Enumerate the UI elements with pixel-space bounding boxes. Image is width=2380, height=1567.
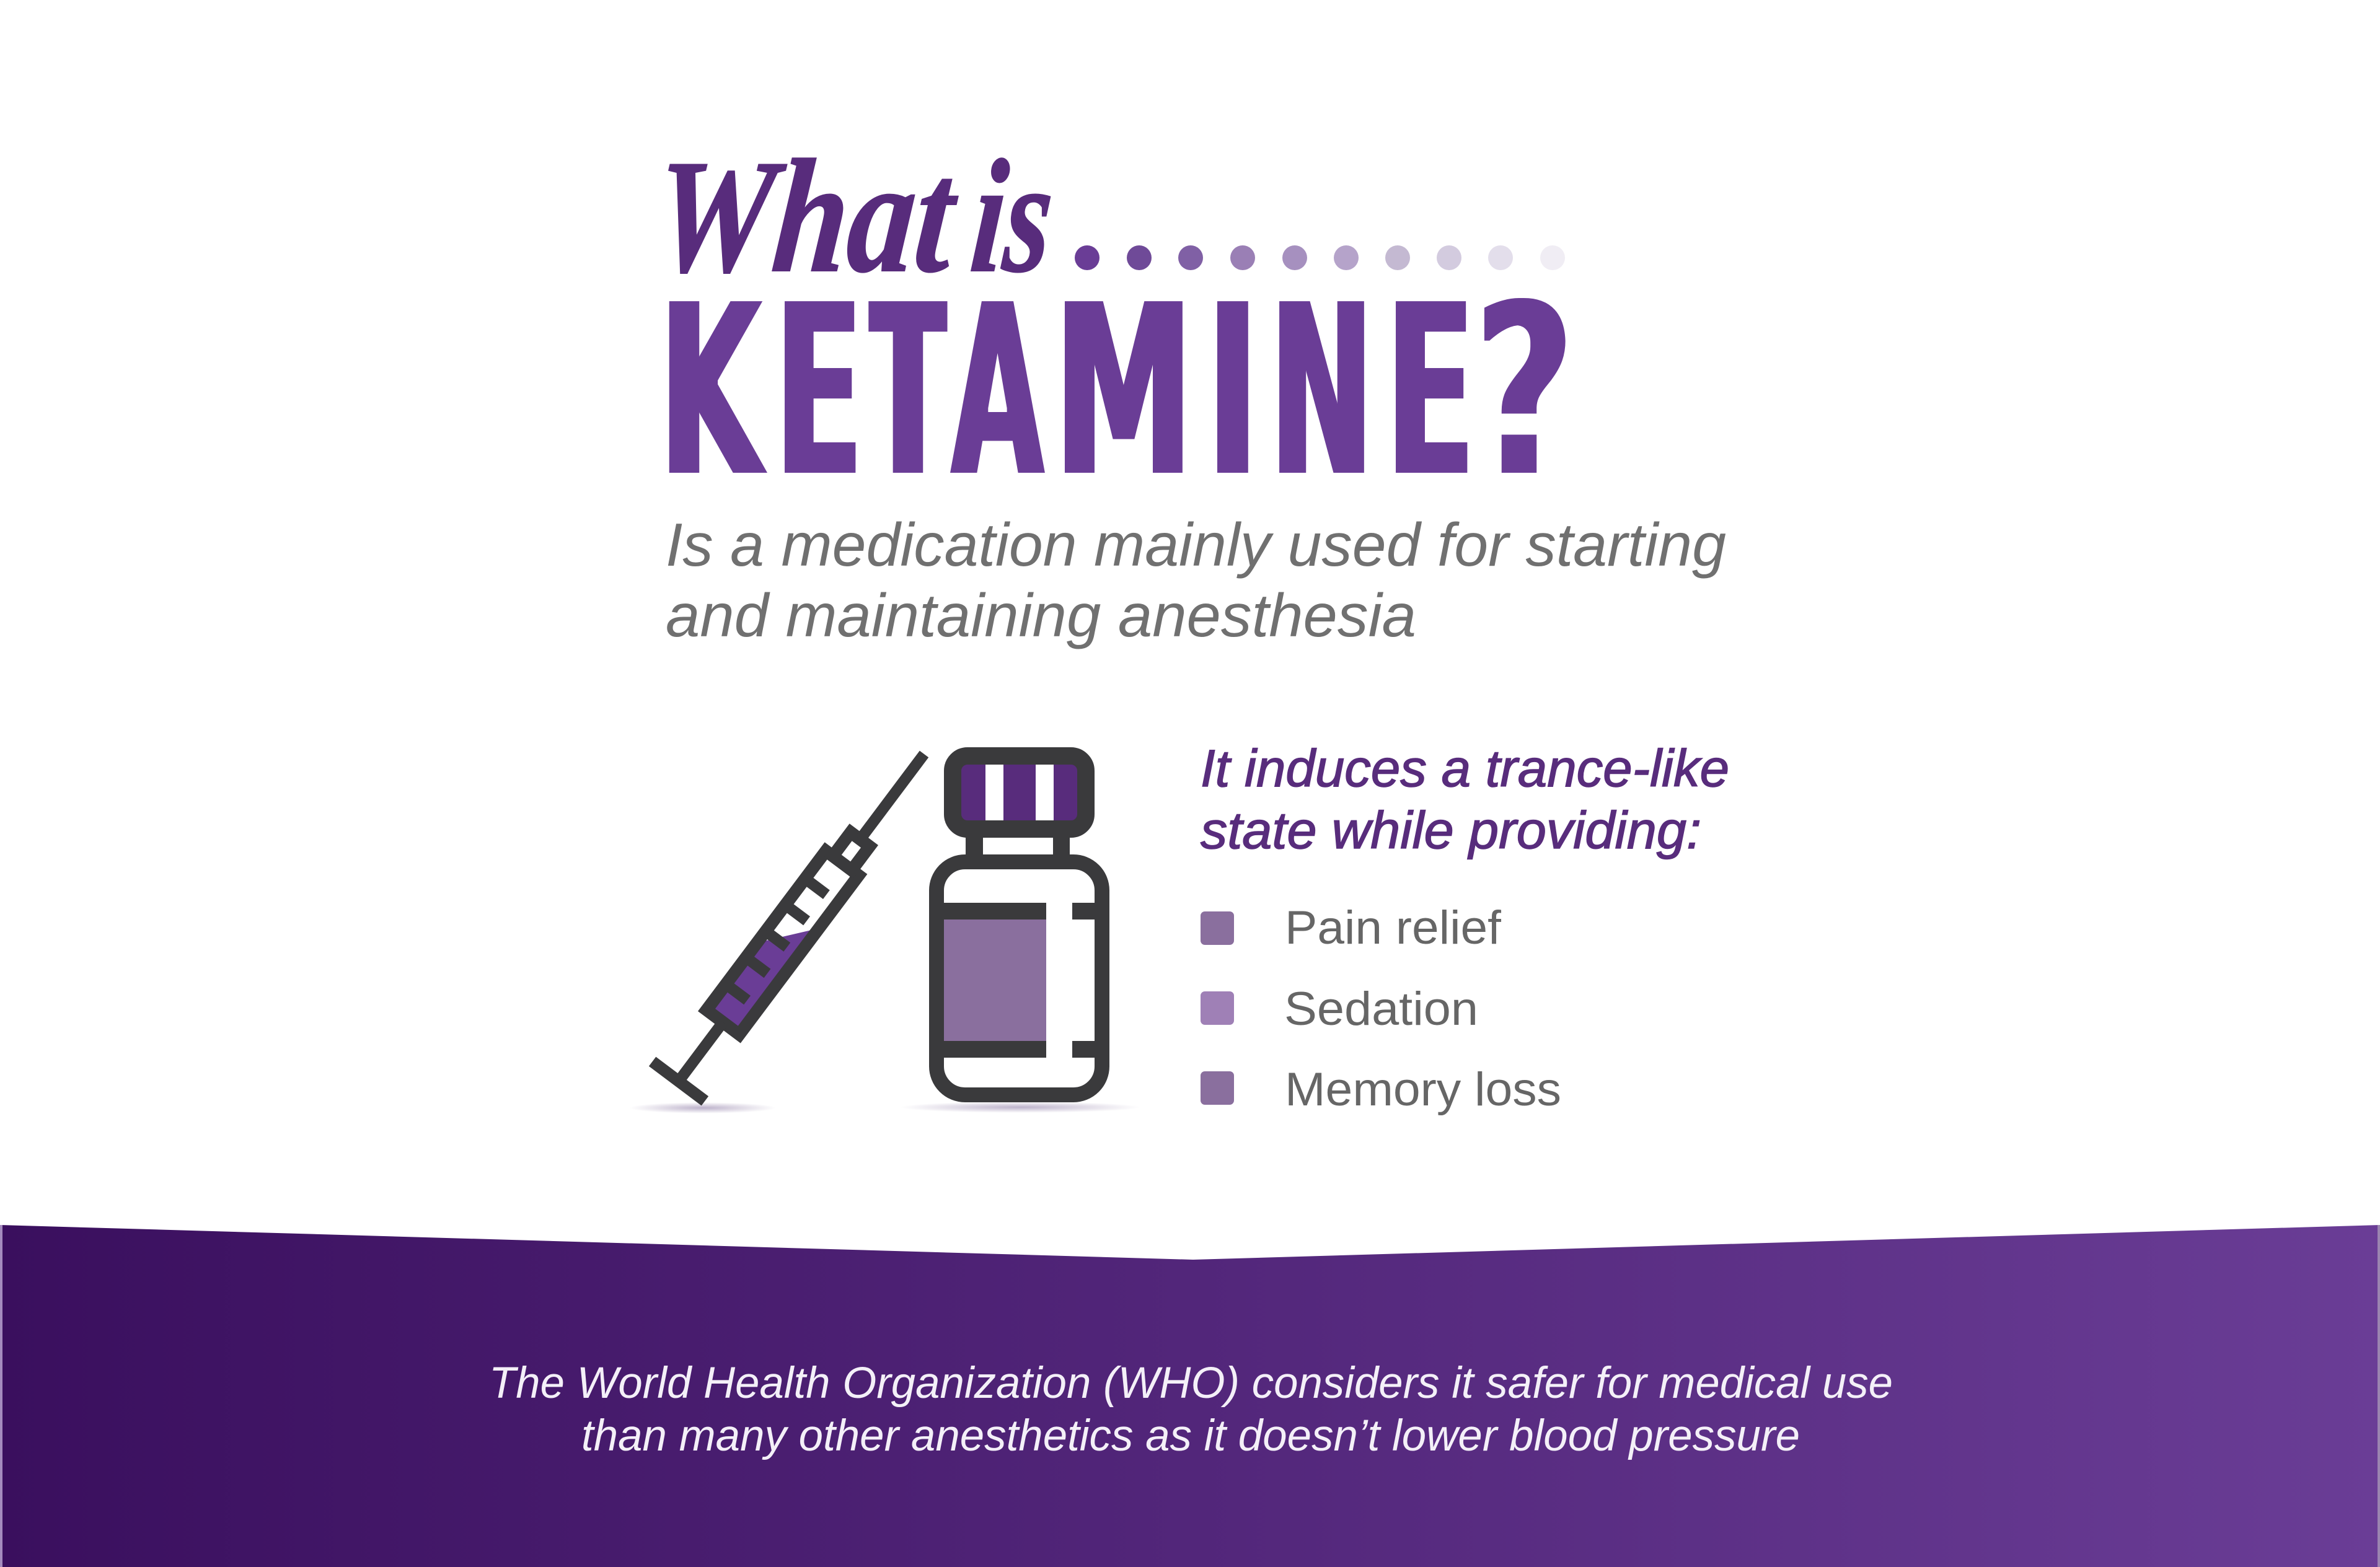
heading: KETAMINE?: E xyxy=(775,252,862,532)
list item: Pain relief: Pain relief xyxy=(1285,902,1502,954)
list: effects xyxy=(1201,902,1561,1116)
heading: What is: is xyxy=(965,126,1060,306)
heading: KETAMINE?: T xyxy=(874,252,943,532)
band text: than many other anesthetics as it doesn’t lower blood pressure xyxy=(581,1411,1800,1460)
panel: WHO footer band xyxy=(0,1225,2380,1567)
heading: KETAMINE?: K xyxy=(659,252,768,532)
list item: Pain relief xyxy=(1201,902,1502,954)
text: trance-like state lead-in xyxy=(1201,739,1729,859)
band background xyxy=(0,1225,2380,1567)
heading: KETAMINE?: E xyxy=(1386,252,1474,532)
heading: What is: What xyxy=(648,126,966,306)
heading: KETAMINE? xyxy=(659,251,1574,532)
icon: medicine vial xyxy=(900,756,1140,1113)
list item: Sedation: Sedation xyxy=(1284,983,1478,1035)
vial cap xyxy=(953,756,1086,829)
dotted fade leader xyxy=(1075,245,1565,270)
list item: Memory loss: Memory loss xyxy=(1285,1063,1561,1116)
icon: syringe xyxy=(630,734,950,1113)
syringe ground shadow xyxy=(630,1102,776,1113)
text: trance-like state lead-in: state while providing: xyxy=(1201,801,1701,859)
heading: KETAMINE?: A xyxy=(951,252,1044,532)
heading: KETAMINE?: M xyxy=(1054,252,1193,532)
vial ground shadow xyxy=(900,1102,1140,1113)
subtitle: and maintaining anesthesia xyxy=(666,581,1416,649)
syringe body xyxy=(653,734,950,1101)
subtitle xyxy=(666,511,1726,649)
band text xyxy=(489,1359,1893,1460)
heading: KETAMINE?: N xyxy=(1271,251,1373,532)
heading: KETAMINE?: I xyxy=(1207,251,1258,532)
vial neck xyxy=(966,830,1070,861)
band text: The World Health Organization (WHO) considers it safer for medical use xyxy=(489,1359,1893,1408)
heading: KETAMINE?: ? xyxy=(1475,252,1574,532)
vial body xyxy=(937,862,1102,1095)
vial label xyxy=(944,903,1096,1058)
subtitle: Is a medication mainly used for starting xyxy=(666,511,1726,579)
list item: Sedation xyxy=(1201,983,1478,1035)
text: trance-like state lead-in: It induces a trance-like xyxy=(1201,739,1729,797)
